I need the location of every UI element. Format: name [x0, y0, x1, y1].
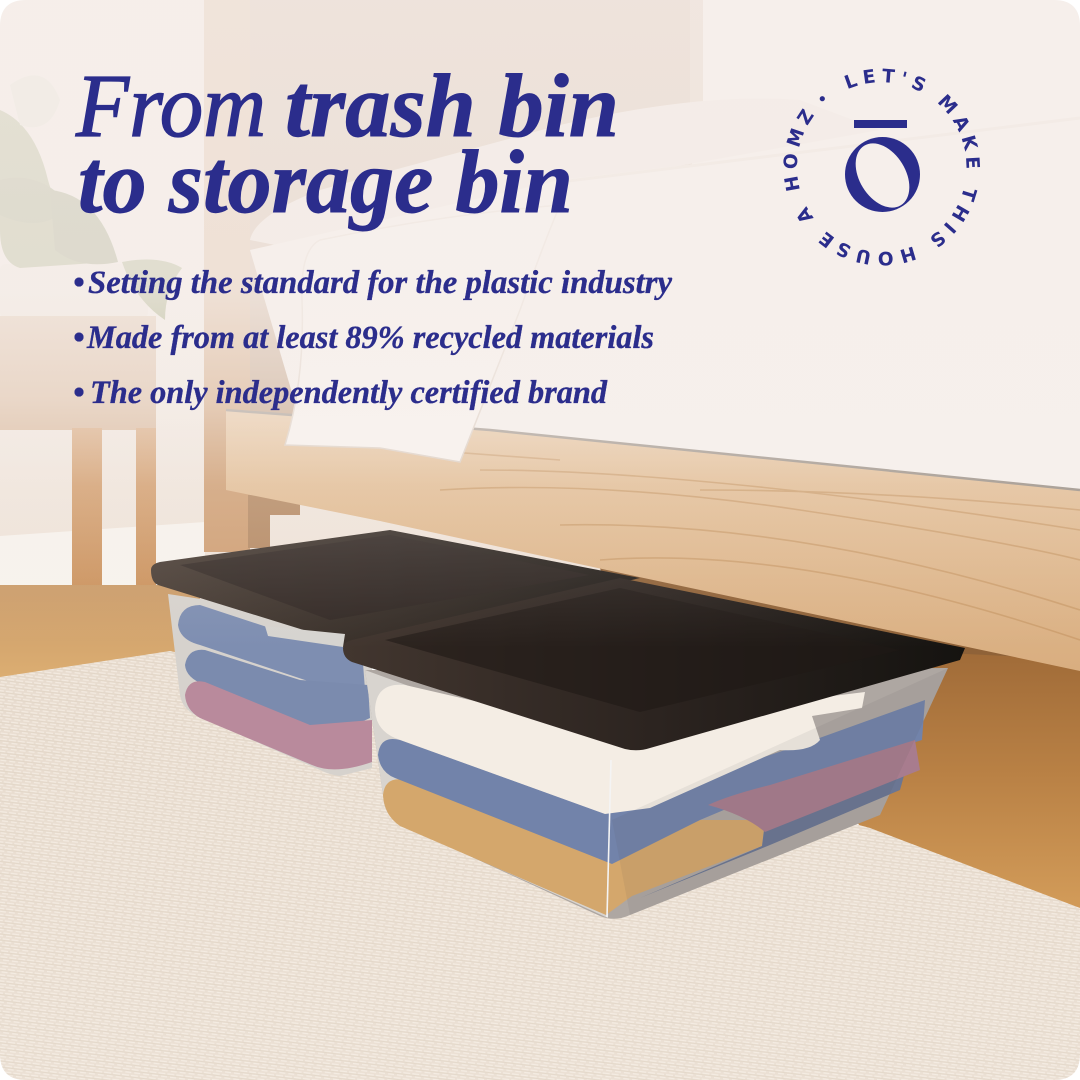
headboard alcove	[240, 0, 692, 420]
under-bed shadow	[600, 568, 1080, 720]
white sweater	[375, 685, 865, 814]
lower blue layer	[640, 772, 905, 898]
back bin lid	[151, 530, 640, 648]
bin handle tab	[265, 626, 345, 647]
wall	[0, 0, 1080, 600]
blue sweater	[378, 700, 925, 864]
rug	[0, 651, 1080, 1080]
front bin lid	[343, 578, 965, 750]
plant	[0, 75, 182, 320]
blue fold upper	[178, 605, 365, 692]
logo bar	[854, 120, 907, 128]
bullet list	[73, 265, 672, 411]
back storage bin	[151, 530, 640, 776]
front bin box	[365, 668, 948, 919]
tan blanket	[383, 779, 765, 915]
bed legs	[248, 495, 300, 548]
bullet one: •	[73, 265, 85, 301]
title: From	[75, 57, 266, 156]
slogan dot	[820, 96, 825, 101]
bed post	[204, 0, 250, 552]
left corner tint	[365, 670, 612, 918]
baseboard	[0, 522, 205, 592]
circular slogan: LET'S MAKE THIS HOUSE A HOMZ	[783, 68, 980, 266]
headboard post	[690, 0, 703, 160]
bullet three: The only independently certified brand	[90, 375, 607, 411]
back bin box	[168, 594, 372, 776]
box shade	[612, 668, 948, 915]
corner edge	[607, 760, 611, 917]
logo badge	[783, 68, 980, 266]
front storage bin	[343, 578, 965, 919]
floor under bed	[700, 640, 1080, 910]
mattress	[250, 118, 1080, 490]
bed rail	[226, 410, 1080, 671]
bullet three: •	[73, 375, 85, 411]
bullet two: •	[73, 320, 85, 356]
title: trash bin	[285, 57, 619, 156]
mattress fold line	[560, 118, 1080, 182]
title: to storage bin	[78, 133, 573, 232]
front pillow	[285, 205, 560, 462]
pale fade overlay	[0, 0, 1080, 700]
side table	[0, 264, 156, 622]
title	[75, 57, 619, 232]
back pillow	[250, 98, 880, 250]
right wall	[703, 0, 1080, 300]
bullet two: Made from at least 89% recycled materials	[86, 320, 654, 356]
logo ring	[845, 134, 920, 217]
mauve sweater	[708, 740, 920, 832]
lid inset	[180, 535, 590, 620]
front lid inset	[385, 588, 900, 712]
bullet one: Setting the standard for the plastic industry	[88, 265, 672, 301]
blue fold lower	[185, 650, 370, 729]
floor	[0, 585, 200, 685]
pink fold	[185, 681, 372, 769]
